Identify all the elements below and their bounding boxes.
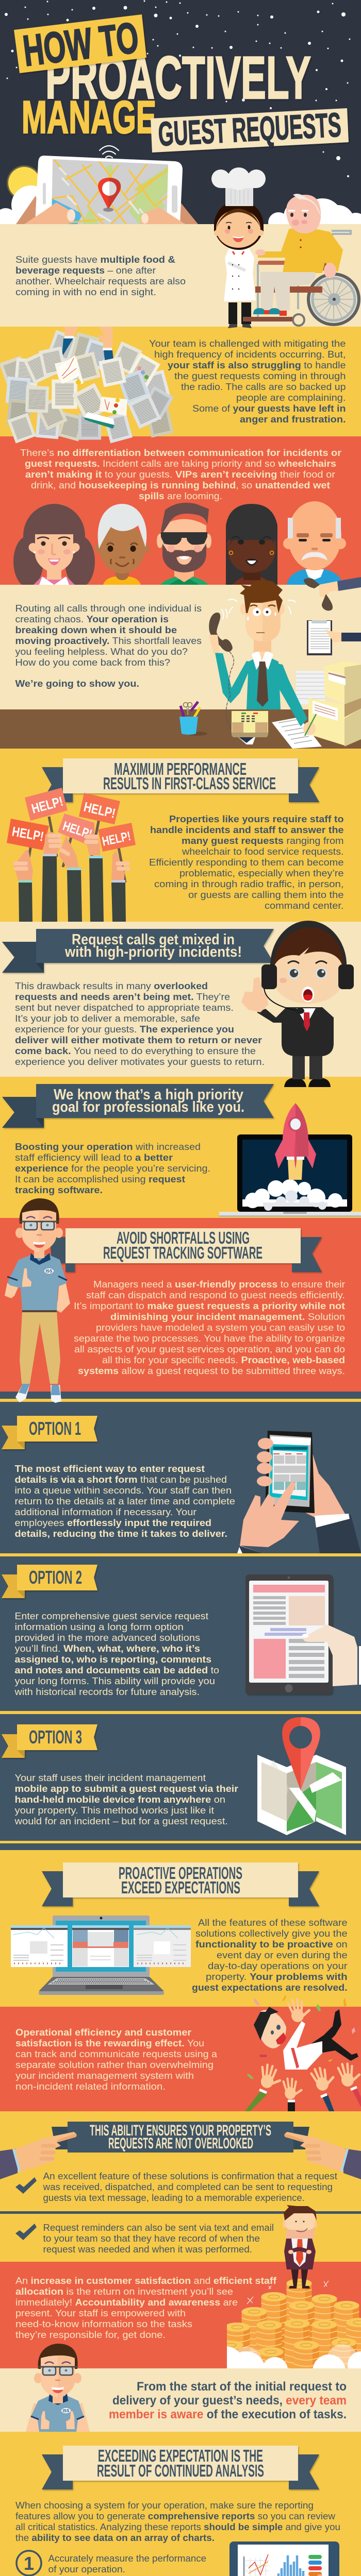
text block: managers need: all aspects of your guest services operation, and you can do — [74, 1344, 345, 1354]
text block: team challenged: high frequency of incidents occurring. But, — [154, 349, 346, 360]
text block: no differentiation: aren’t making it to your guests. VIPs aren’t receiving their food or — [25, 469, 331, 480]
text block: this drawback: experience for your guests. The experience you — [15, 1024, 229, 1035]
illustration: presenter with glasses giving thumbs up: ISS — [46, 1269, 53, 1274]
text block: request reminders: to your team so that they have record of when the — [43, 2233, 260, 2244]
text block: option 3: hand-held mobile device from anywhere on — [14, 1794, 224, 1805]
text block: option 2: you’ll find. When, what, where, who it’s — [14, 1643, 190, 1654]
text block: option 3: would for an incident – but for a guest request. — [14, 1816, 228, 1826]
text block: properties like yours: wheelchair to food service requests. — [182, 846, 343, 857]
list item 1: of your operation. — [48, 2564, 125, 2574]
text block: boosting your operation: It can be accomplished using request — [15, 1174, 183, 1184]
icon: check mark — [15, 2177, 37, 2194]
icon: tablet with map held in hands — [16, 156, 198, 227]
raised arms and fists — [14, 832, 125, 882]
option 2 label — [2, 1565, 97, 1598]
text block: routing all calls: We’re going to show you. — [15, 678, 139, 689]
heading ribbon: avoid shortfalls — [50, 1228, 322, 1272]
sign: help 2: HELP! — [83, 799, 117, 821]
illustration: phone in hands with request form — [237, 1431, 361, 1553]
sign: help 3: HELP! — [11, 823, 45, 844]
text block: boosting your operation: staff efficiency will lead to a better — [15, 1152, 170, 1163]
text block: operational efficiency: Operational efficiency and customer — [15, 2027, 191, 2038]
text block: excellent feature: guests via text message, leading to a memorable experience. — [43, 2192, 305, 2203]
text block: option 3: your property. This method works just like it — [14, 1805, 214, 1816]
illustration: left pointing hand — [0, 2132, 77, 2179]
text block: team challenged: the guest requests coming in through — [174, 370, 346, 381]
illustration: stacks of coins — [227, 2279, 361, 2368]
text block: this drawback: requests and needs aren’t being met. They’re — [15, 991, 228, 1002]
text block: when choosing a system: all critical statistics. Analyzing these reports should be simple and give you — [15, 2521, 339, 2532]
title: MANAGE: MANAGE — [22, 91, 156, 143]
illustration: businessman standing on coins — [283, 2205, 317, 2289]
illustration: hands raising help signs — [7, 788, 136, 922]
text block: option 2: assigned to, who is reporting, comments — [14, 1654, 211, 1665]
text block: option 1: details, reducing the time it takes to deliver. — [14, 1528, 227, 1539]
text block: all the features: property. Your problems with — [206, 1971, 338, 1982]
illustration: presenter giving two thumbs up: ISS — [63, 2409, 70, 2413]
text block: option 1: The most efficient way to enter request — [14, 1463, 205, 1474]
icon: clouds behind old man — [268, 198, 361, 224]
text block: increase in customer satisfaction: allocation is the return on investment you’ll see — [15, 2286, 221, 2297]
text block: boosting your operation: experience for the people you’re servicing. — [15, 1163, 201, 1174]
man body — [247, 654, 281, 709]
illustration: call center agent with headset — [241, 921, 354, 1087]
text block: properties like yours: problematic, especially when they’re — [179, 868, 343, 878]
heading ribbon: proactive operations — [42, 1862, 319, 1906]
heading banner: request calls: Request calls get mixed in — [72, 931, 235, 948]
face: older woman with white hair — [95, 504, 150, 585]
sign: help 1 — [25, 788, 68, 821]
heading ribbon: proactive operations: PROACTIVE OPERATIONS — [119, 1863, 242, 1883]
list item 1: 1 — [24, 2553, 34, 2574]
text block: option 2: and notes and documents can be added to — [14, 1665, 219, 1675]
text block: team challenged: the radio. The calls are so backed up — [181, 381, 346, 392]
option 3 label — [2, 1724, 97, 1758]
illustration: hands holding tablet with charts — [201, 2541, 355, 2576]
heading banner: high priority goal: We know that’s a high priority — [54, 1087, 243, 1103]
text block: when choosing a system: When choosing a system for your operation, make sure the reporting — [15, 2500, 314, 2511]
sign: help 3 — [7, 819, 49, 850]
illustration: old man in wheelchair — [243, 194, 359, 326]
heading banner: high priority goal — [2, 1084, 274, 1128]
face: bearded man with sunglasses — [157, 503, 211, 585]
text block: operational efficiency: can track and communicate requests using a — [15, 2048, 218, 2059]
title: HOW TO yellow box: HOW TO — [21, 13, 141, 75]
text block: increase in customer satisfaction: need-to-know information so the tasks — [15, 2318, 192, 2329]
text block: from the start: From the start of the initial request to — [137, 2380, 347, 2394]
text block: routing all calls: you feeling helpless. What do you do? — [15, 646, 188, 657]
illustration: overwhelmed man at desk on the phone — [209, 580, 361, 749]
text block: managers need: staff can dispatch and respond to guest needs efficiently. — [86, 1290, 345, 1300]
text block: managers need: separate the two processes. You have the ability to organize — [74, 1333, 345, 1344]
heading ribbon: maximum performance — [42, 758, 319, 802]
illustration: map with location pin — [257, 1717, 346, 1835]
icon: pencil cup — [179, 702, 207, 736]
man head — [254, 636, 271, 652]
text block: increase in customer satisfaction: present. Your staff is empowered with — [15, 2308, 186, 2318]
text block: team challenged: anger and frustration. — [240, 414, 346, 425]
text block: no differentiation: drink, and housekeeping is running behind , so unattended wet — [31, 480, 325, 490]
face: bald older man with mustache — [283, 501, 346, 585]
title: HOW TO yellow box — [14, 13, 146, 75]
text block: properties like yours: command center. — [265, 900, 343, 911]
telephone base — [232, 711, 268, 737]
option 1 label: OPTION 1 — [29, 1418, 81, 1439]
sign: help 4: HELP! — [61, 819, 94, 842]
illustration: laptop with three software windows — [11, 1916, 191, 1995]
sign: help 2 — [79, 793, 120, 824]
list item 1: Accurately measure the performance — [48, 2553, 206, 2564]
sign: help 1: HELP! — [30, 793, 64, 817]
text block: no differentiation: spills are looming. — [139, 490, 220, 501]
text block: option 3: Your staff uses their incident management — [14, 1772, 206, 1783]
text block: when choosing a system: features allow you to generate comprehensive reports so you can review — [15, 2511, 334, 2521]
text block: option 2: provided in the more advanced solutions — [14, 1632, 200, 1643]
text block: properties like yours: Efficiently responding to them can become — [149, 857, 343, 868]
text block: option 3: mobile app to submit a guest request via their — [14, 1783, 238, 1794]
text block: operational efficiency: separate solution rather than overwhelming — [15, 2059, 214, 2070]
heading banner: high priority goal: goal for professionals like you. — [52, 1099, 244, 1115]
heading ribbon: maximum performance: MAXIMUM PERFORMANCE — [114, 759, 247, 778]
heading banner: request calls — [2, 929, 274, 973]
text block: boosting your operation: Boosting your operation with increased — [15, 1141, 196, 1152]
illustration: tablet with long form and hand — [245, 1574, 361, 1694]
illustration: hand holding phone receiver from right — [304, 577, 361, 611]
text block: managers need: diminishing your incident management. Solution — [110, 1311, 342, 1322]
pen hand — [303, 722, 316, 735]
illustration: man thrown in the air by hands with confetti — [245, 1995, 361, 2111]
text block: routing all calls: How do you come back from this? — [15, 657, 170, 668]
confetti — [247, 1995, 355, 2079]
text block: excellent feature: was received, dispatched, and completed can be sent to requesting — [42, 2181, 333, 2192]
text block: suite guests: beverage requests – one after — [15, 265, 153, 276]
text block: this drawback: come back. You need to do everything to ensure the — [15, 1045, 242, 1056]
text block: this drawback: deliver will either motivate them to return or never — [15, 1035, 262, 1045]
text block: managers need: all this for your specific needs. Proactive, web-based — [102, 1354, 339, 1365]
text block: increase in customer satisfaction: immediately! Accountability and awareness are — [15, 2297, 237, 2308]
text block: routing all calls: breaking down when it should be — [15, 624, 177, 635]
face: woman with black hair and hoop earrings — [226, 504, 277, 585]
text block: increase in customer satisfaction: An increase in customer satisfaction and efficient staff — [15, 2275, 273, 2286]
toggles — [308, 2555, 322, 2576]
text block: all the features: functionality to be proactive on — [195, 1939, 347, 1950]
text block: properties like yours: many guest requests ranging from — [182, 835, 340, 846]
text block: routing all calls: Routing all calls through one individual is — [15, 603, 202, 614]
text block: team challenged: people are complaining. — [236, 392, 346, 403]
illustration: hand holding clipboard — [307, 620, 361, 655]
text block: operational efficiency: satisfaction is the rewarding effect. You — [15, 2038, 203, 2048]
sign: help 5 — [98, 823, 136, 852]
text block: excellent feature: An excellent feature of these solutions is confirmation that a request — [43, 2171, 337, 2181]
text block: properties like yours: or guests are calling them into the — [188, 889, 343, 900]
illustration: five frustrated guest faces — [13, 501, 346, 587]
face: woman with brown hair — [13, 504, 95, 587]
illustration: chef — [211, 167, 266, 328]
text block: team challenged: Your team is challenged with mitigating the — [149, 338, 346, 349]
text block: all the features: solutions collectively give you the — [195, 1928, 348, 1939]
text block: option 2: information using a long form option — [14, 1621, 184, 1632]
desk paper and pen — [238, 717, 322, 749]
illustration: buried under paper with arms reaching out — [0, 327, 174, 444]
text block: managers need: Managers need a user-friendly process to ensure their — [93, 1279, 341, 1290]
illustration: right pointing hand — [284, 2132, 361, 2179]
panel: header starfield — [5, 0, 351, 177]
icon: wifi — [100, 146, 119, 158]
falling man — [311, 2009, 341, 2048]
text block: this drawback: It’s your job to deliver a memorable, safe — [15, 1013, 200, 1024]
text block: properties like yours: handle incidents and staff to answer the — [150, 824, 343, 835]
text block: option 1: additional information if necessary. Your — [14, 1506, 196, 1517]
line chart — [244, 2554, 269, 2576]
text block: properties like yours: coming in through radio traffic, in person, — [154, 878, 343, 889]
text block: option 1: into a queue within seconds. Your staff can then — [14, 1485, 232, 1496]
text block: properties like yours: Properties like yours require staff to — [169, 814, 343, 824]
option 3 label: OPTION 3 — [29, 1726, 82, 1748]
text block: all the features: guest expectations are resolved. — [192, 1982, 348, 1993]
text block: request reminders: request was needed and when it was performed. — [43, 2244, 252, 2255]
text block: from the start: member is aware of the execution of tasks. — [109, 2408, 355, 2421]
telephone handset — [209, 613, 233, 652]
heading ribbon: proactive operations: EXCEED EXPECTATIONS — [121, 1878, 240, 1897]
heading ribbon: exceeding expectation — [42, 2446, 319, 2489]
text block: when choosing a system: the ability to see data on an array of charts. — [15, 2532, 211, 2543]
text block: this drawback: This drawback results in many overlooked — [15, 980, 205, 991]
icon: check mark — [15, 2224, 37, 2240]
text block: managers need: providers have modeled a system you can easily use to — [96, 1322, 345, 1333]
illustration: rocket launching from laptop — [219, 1103, 361, 1217]
option 2 label: OPTION 2 — [29, 1567, 82, 1588]
list item 1 — [17, 2551, 206, 2575]
text block: option 2: Enter comprehensive guest service request — [14, 1611, 208, 1621]
text block: no differentiation: There’s no differentiation between communication for incidents or — [20, 447, 321, 458]
text block: managers need: systems allow a guest request to be submitted three ways. — [78, 1365, 331, 1376]
text block: option 1: return to the details at a later time and complete — [14, 1496, 235, 1506]
heading ribbon: avoid shortfalls: AVOID SHORTFALLS USING — [117, 1228, 250, 1247]
text block: suite guests: another. Wheelchair requests are also — [15, 276, 186, 286]
text block: request reminders: Request reminders can also be sent via text and email — [43, 2222, 274, 2233]
heading banner: request calls: with high-priority incidents! — [64, 944, 242, 960]
text block: this drawback: experience you deliver motivates your guests to return. — [15, 1056, 265, 1067]
text block: boosting your operation: tracking software. — [15, 1184, 103, 1195]
text block: all the features: day-to-day operations on your — [208, 1960, 348, 1971]
sign: help 5: HELP! — [101, 829, 132, 849]
text block: suite guests: coming in with no end in sight. — [15, 286, 156, 297]
text block: suite guests: Suite guests have multiple food & — [15, 254, 170, 265]
text block: option 2: with historical records for future analysis. — [14, 1686, 200, 1697]
text block: this drawback: sent but never dispatched to appropriate teams. — [15, 1002, 234, 1013]
icon: sun with clouds — [0, 165, 38, 224]
illustration: sparkles around coins — [247, 2281, 329, 2304]
text block: operational efficiency: your incident management system with — [15, 2070, 194, 2081]
text block: all the features: event day or even during the — [217, 1950, 348, 1960]
text block: option 1: details is via a short form that can be pushed — [14, 1474, 221, 1485]
bar chart — [278, 2555, 303, 2576]
text block: team challenged: Some of your guests have left in — [192, 403, 339, 414]
text block: operational efficiency: non-incident related information. — [15, 2081, 166, 2092]
heading ribbon: ability ensures — [52, 2122, 309, 2153]
boxes and paper stacks — [296, 661, 361, 747]
illustration: presenter with glasses giving thumbs up — [5, 1198, 70, 1403]
illustration: presenter giving two thumbs up — [26, 2344, 90, 2432]
option 1 label — [2, 1416, 97, 1449]
text block: increase in customer satisfaction: they’re responsible for, get done. — [15, 2329, 166, 2340]
text block: routing all calls: creating chaos. Your operation is — [15, 614, 164, 624]
sign: help 4 — [58, 814, 94, 845]
text block: managers need: It’s important to make guest requests a priority while not — [74, 1300, 330, 1311]
hands below — [245, 2092, 267, 2111]
right hand — [301, 2574, 355, 2576]
text block: routing all calls: moving proactively. This shortfall leaves — [15, 635, 196, 646]
text block: all the features: All the features of these software — [198, 1917, 348, 1928]
text block: no differentiation: guest requests. Incident calls are taking priority and so wheelchairs — [25, 458, 333, 469]
text block: option 1: employees effortlessly input the required — [14, 1517, 202, 1528]
text block: option 2: your long forms. This ability will provide you — [14, 1675, 215, 1686]
text block: from the start: delivery of your guest’s needs, every team — [112, 2394, 351, 2408]
text block: team challenged: your staff is also struggling to handle — [168, 360, 343, 370]
